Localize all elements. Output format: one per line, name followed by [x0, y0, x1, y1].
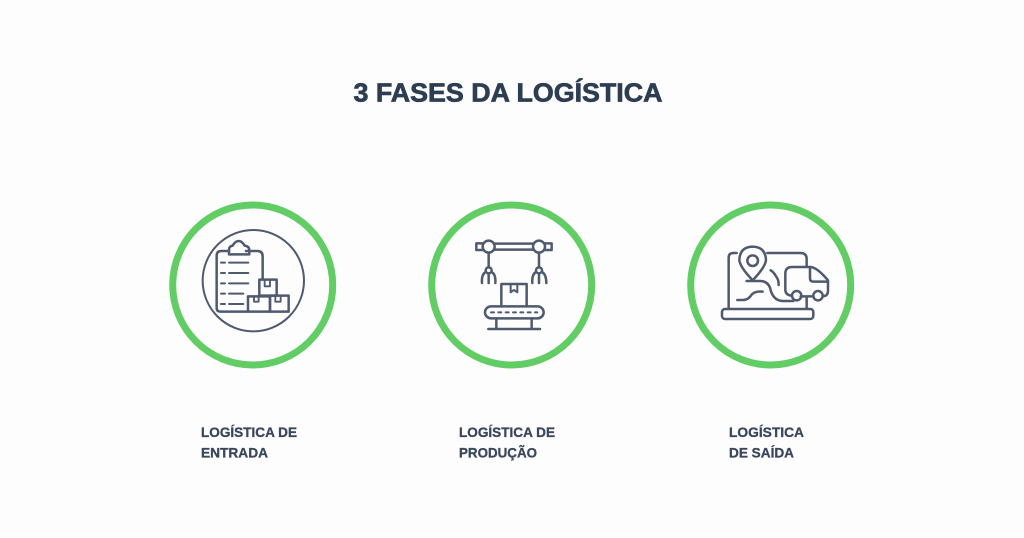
icon: clipboard and boxes — [203, 230, 304, 331]
panel: logística de produção — [432, 205, 592, 460]
green ring: produção — [432, 205, 592, 365]
label: entrada: ENTRADA — [201, 444, 268, 460]
label: saída — [729, 424, 804, 460]
title: 3 FASES DA LOGÍSTICA — [354, 78, 663, 108]
label: entrada — [201, 424, 297, 460]
green ring: saída — [691, 205, 851, 365]
label: saída: LOGÍSTICA — [729, 424, 804, 440]
panel: logística de saída — [691, 205, 851, 460]
icon: robotic arms and conveyor — [476, 241, 552, 329]
icon: laptop, map pin and truck — [722, 247, 828, 319]
label: produção: LOGÍSTICA DE — [459, 424, 555, 440]
label: saída: DE SAÍDA — [729, 444, 794, 460]
label: entrada: LOGÍSTICA DE — [201, 424, 297, 440]
label: produção: PRODUÇÃO — [459, 444, 537, 460]
panel: logística de entrada — [173, 205, 333, 460]
green ring: entrada — [173, 205, 333, 365]
label: produção — [459, 424, 555, 460]
